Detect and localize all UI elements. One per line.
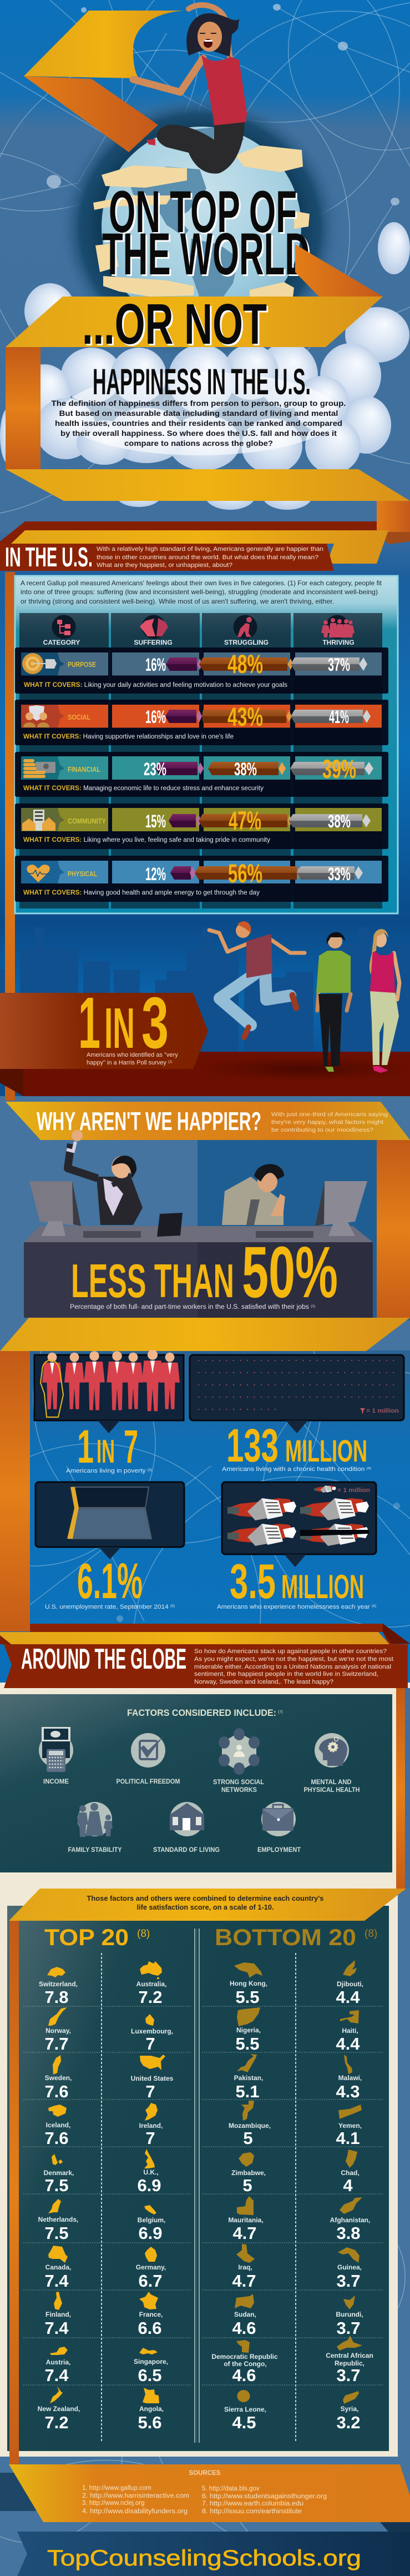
stat: 3.5 million homeless (217, 1482, 376, 1610)
top 20 column one: 7.4 (44, 2271, 69, 2291)
top 20 column two: 6.5 (138, 2366, 162, 2385)
banner text: Norway, Sweden and Iceland,. The least happy? (194, 1679, 333, 1685)
footer banner: TopCounselingSchools.org (47, 2546, 361, 2570)
bottom 20 column one: of the Congo, (224, 2360, 267, 2368)
bottom 20 column one: 4.6 (232, 2366, 256, 2385)
heading: bottom 20: (8) (365, 1928, 377, 1940)
row: purpose: 37% (328, 655, 350, 675)
dark band behind sources (0, 2473, 61, 2511)
row: social: SOCIAL (68, 714, 90, 721)
stat: 133 million chronic: (4) (367, 1467, 371, 1470)
top 20 column two: 6.6 (138, 2318, 162, 2338)
orange strip (9, 1921, 19, 2465)
panel: factors considered: (7) (278, 1710, 283, 1714)
intro paragraph: The definition of happiness differs from person to person, group to group. (51, 399, 346, 408)
source list one: 1. http://www.gallup.com (82, 2485, 151, 2492)
top 20 column two: 6.9 (138, 2223, 163, 2243)
bottom 20 column two: 3.7 (336, 2366, 361, 2385)
bottom 20 column one (211, 1980, 278, 2432)
illustration: woman in pink (369, 929, 399, 1073)
bottom 20 column two: Chad, (341, 2169, 360, 2177)
bottom 20 column one: 5 (243, 2128, 253, 2148)
source list two: 8. http://issuu.com/earthinstitute (202, 2508, 302, 2515)
why text (271, 1111, 388, 1133)
bottom 20 column one: 4.5 (232, 2413, 256, 2432)
panel: gallup survey (15, 576, 398, 913)
banner: in the u.s.: IN THE U.S. (5, 543, 93, 573)
ribbon: gold below desk (0, 1318, 410, 1351)
top 20 column one: Netherlands, (38, 2216, 78, 2223)
city skyline (0, 927, 410, 1052)
title: on top of the world (102, 178, 311, 289)
bottom 20 column two: Central African (326, 2352, 373, 2359)
bottom 20 column one: Nigeria, (236, 2026, 261, 2034)
icon: suffering piggy bank (140, 615, 168, 639)
top 20 column one: 7.5 (44, 2176, 69, 2195)
survey intro: A recent Gallup poll measured Americans' feelings about their own lives in five categories. (1) For each category, people fit (21, 580, 382, 587)
banner text (194, 1648, 394, 1685)
top 20 column two: 5.6 (138, 2413, 162, 2432)
top 20 column one: Norway, (45, 2027, 71, 2035)
ribbon: gold banner with or not: ...OR NOT (82, 292, 267, 356)
stat: 1 in 7 poverty (34, 1350, 184, 1474)
row: purpose: 48% (227, 649, 263, 679)
heading: top 20: TOP 20 (44, 1924, 129, 1950)
stat: 1 in 7 poverty: 7 (124, 1420, 138, 1473)
row: community: 47% (229, 806, 261, 835)
row: purpose: PURPOSE (68, 661, 96, 669)
illustration: woman in green (316, 932, 351, 1072)
row: purpose (15, 647, 388, 694)
top 20 column one (38, 1980, 80, 2432)
icon: thriving group (321, 615, 355, 639)
column headers: SUFFERING (134, 639, 173, 646)
bottom 20 column two: Djibouti, (337, 1980, 363, 1988)
why text: they're very happy, what factors might (271, 1119, 383, 1126)
stat caption: Americans who identified as "very (87, 1052, 178, 1058)
row: physical: PHYSICAL (68, 870, 97, 878)
pictogram rows (196, 1360, 398, 1415)
banner text: miserable either. According to a United Nations analysis of national (194, 1664, 391, 1670)
ribbon: left orange vertical (6, 347, 41, 469)
intro paragraph: But based on measurable data including standard of living and mental (59, 409, 338, 418)
icon: open briefcase (67, 1487, 151, 1539)
bottom 20 column one: Hong Kong, (230, 1980, 267, 1987)
banner text: So how do Americans stack up against people in other countries? (194, 1648, 387, 1655)
illustration: jumping man (209, 921, 305, 1037)
ribbon: why band (6, 1102, 410, 1140)
row: purpose: 16% (145, 655, 166, 675)
row: community: 38% (328, 811, 351, 831)
top 20 column one: 7.2 (44, 2413, 69, 2432)
bottom 20 column two: Afghanistan, (330, 2216, 370, 2224)
panel: factors considered (0, 1694, 392, 1872)
bottom 20 column one: 5.5 (235, 1987, 260, 2007)
bottom 20 column one: Zimbabwe, (231, 2169, 266, 2177)
factor: income: INCOME (43, 1779, 69, 1785)
ribbons above around the globe (0, 1624, 410, 1644)
bottom 20 column two: 4.4 (336, 1987, 360, 2007)
ribbon: satisfaction note: life satisfaction score, on a scale of 1-10. (136, 1904, 274, 1911)
stat: 133 million chronic: Americans living with a chronic health condition (222, 1466, 350, 1473)
banner: around the globe (4, 1643, 408, 1688)
stat: 133 million chronic: 133 (226, 1419, 279, 1472)
stat: 1 in 7 poverty: Americans living in poverty (66, 1468, 139, 1474)
bottom 20 column one: Iraq, (238, 2263, 252, 2271)
bottom 20 column two: Yemen, (338, 2122, 362, 2130)
icon: category (52, 615, 75, 639)
stat: 6.1% unemployment: 6.1% (77, 1554, 143, 1609)
bottom 20 column one: 5 (242, 2176, 252, 2195)
source list two: 7. http://www.earth.columbia.edu (202, 2500, 303, 2507)
ribbon: satisfaction note (9, 1889, 406, 1921)
banner text (97, 546, 323, 569)
bottom 20 column two: 4.1 (336, 2128, 360, 2148)
survey intro: or thriving (strong and consistent well-being). While most of us aren't suffering, we aren't thriving, either. (21, 598, 334, 605)
stat caption (87, 1052, 178, 1066)
top 20 column one: 7.4 (44, 2366, 69, 2385)
bottom 20 column one: Democratic Republic (211, 2353, 278, 2361)
top 20 column one: 7.8 (44, 1987, 69, 2007)
source list one: 4. http://www.disabilityfunders.org (82, 2508, 188, 2515)
top 20 column two: 7 (145, 2128, 155, 2148)
top 20 column one: 7.5 (44, 2223, 69, 2243)
bottom 20 column one: 4.7 (232, 2223, 257, 2243)
top 20 column one: Denmark, (44, 2169, 74, 2177)
bottom 20 column two: 3.7 (336, 2318, 361, 2338)
stat: 1 in 7 poverty: (3) (148, 1469, 152, 1472)
orange right strip (377, 1140, 410, 1318)
bottom 20 column two: Guinea, (337, 2263, 362, 2271)
factor: strong social networks: NETWORKS (221, 1787, 257, 1794)
top 20 column two: U.K., (143, 2168, 159, 2176)
factor: mental and physical health: MENTAL AND (311, 1779, 352, 1786)
stat: 6.1% unemployment (36, 1482, 184, 1610)
row: financial: 38% (234, 759, 257, 779)
row: social: 41% (329, 707, 349, 727)
bottom 20 column one: 5.1 (235, 2082, 260, 2101)
balloons (0, 222, 410, 510)
stat: less than 50%: LESS THAN (71, 1255, 234, 1308)
column backgrounds (19, 613, 382, 908)
source list one: 3. http://www.nclej.org (82, 2500, 144, 2507)
why text: With just one-third of Americans saying (271, 1111, 388, 1118)
ribbon: upper orange fold (24, 76, 158, 152)
banner text: With a relatively high standard of living, Americans generally are happier than (97, 546, 323, 553)
ribbon: upper gold banner (24, 11, 184, 78)
row: financial: WHAT IT COVERS: Managing economic life to reduce stress and enhance security (23, 785, 264, 792)
column headers (43, 639, 355, 646)
row: purpose: WHAT IT COVERS: Liking your daily activities and feeling motivation to achieve your goals (24, 682, 287, 689)
factor: standard of living (153, 1802, 220, 1854)
top 20 column one: Iceland, (46, 2121, 70, 2129)
ribbon: gold banner with or not (6, 292, 383, 358)
stat caption: (2) (168, 1061, 172, 1064)
stat: 6.1% unemployment: U.S. unemployment rate, September 2014 (45, 1604, 159, 1610)
bottom 20 column two: Republic, (335, 2359, 365, 2367)
intro paragraph: by their overall happiness. So where does the U.S. fall and how does it (60, 429, 337, 438)
row: financial: FINANCIAL (68, 766, 100, 774)
bottom 20 column one: 4.6 (232, 2318, 256, 2338)
top 20 column two: Angola, (139, 2405, 164, 2413)
bottom 20 country maps (234, 1960, 362, 2404)
factor: political freedom: POLITICAL FREEDOM (117, 1779, 180, 1785)
factor: strong social networks: STRONG SOCIAL (213, 1779, 264, 1786)
factor: family stability: FAMILY STABILITY (68, 1847, 122, 1854)
banner: in the u.s. (0, 543, 334, 573)
ribbon: satisfaction note: Those factors and others were combined to determine each country's (87, 1895, 324, 1902)
stat: 133 million chronic (190, 1355, 404, 1473)
top 20 column one: Canada, (45, 2263, 71, 2271)
people group (41, 1350, 180, 1417)
legend: = 1 million (366, 1408, 399, 1414)
stat: 133 million chronic: MILLION (285, 1433, 367, 1468)
row: physical: 33% (328, 864, 351, 884)
row: physical: 12% (145, 864, 166, 884)
stat caption: happy" in a Harris Poll survey (87, 1059, 166, 1066)
factor: political freedom (117, 1733, 180, 1785)
bottom 20 column one: Sudan, (234, 2311, 256, 2318)
top 20 column one: 7.6 (44, 2082, 69, 2101)
row: financial: 39% (322, 754, 356, 784)
top 20 column one: Sweden, (45, 2074, 72, 2082)
top 20 column two: United States (131, 2075, 174, 2082)
bottom 20 column two: Burundi, (336, 2311, 363, 2318)
bottom 20 column two: 4 (343, 2176, 353, 2195)
stat: less than 50%: 50% (242, 1231, 338, 1313)
monitor left (29, 1181, 81, 1236)
survey intro (21, 580, 382, 605)
banner: 1 in 3: 1 (78, 982, 100, 1063)
factor: mental and physical health: PHYSICAL HEALTH (304, 1787, 360, 1794)
panel: factors considered: FACTORS CONSIDERED INCLUDE: (127, 1708, 276, 1718)
top 20 column one: Finland, (45, 2311, 71, 2318)
top 20 column one: 7.4 (44, 2318, 69, 2338)
factor: strong social networks (213, 1728, 264, 1794)
top 20 column two (131, 1980, 174, 2432)
bottom 20 column one: 4.7 (232, 2271, 256, 2291)
illustration: happy woman at desk (67, 1130, 143, 1225)
row: physical: WHAT IT COVERS: Having good health and ample energy to get through the day (23, 890, 260, 896)
bottom 20 column two: 4.4 (336, 2034, 360, 2053)
globe with clouds (59, 94, 341, 361)
banner text: What are they happiest, or unhappiest, about? (97, 562, 232, 569)
top 20 column one: New Zealand, (38, 2405, 80, 2413)
continents (128, 127, 244, 331)
dark corner fold (380, 2522, 410, 2532)
factor: employment: EMPLOYMENT (257, 1847, 301, 1854)
row: financial (15, 752, 388, 797)
cream clouds (93, 145, 310, 297)
source list one: 2. http://www.harrisinteractive.com (82, 2493, 189, 2499)
footer banner (17, 2532, 410, 2576)
ribbon: sources (9, 2464, 410, 2522)
stat: less than 50% (70, 1231, 338, 1313)
banner: around the globe: AROUND THE GLOBE (21, 1643, 186, 1675)
bottom 20 column two: Malawi, (338, 2074, 362, 2082)
bottom 20 column one: Pakistan, (234, 2074, 263, 2082)
row: financial: 23% (144, 759, 166, 779)
floor (0, 1052, 410, 1096)
row: community: 15% (145, 811, 166, 831)
row: community (15, 804, 388, 849)
column headers: STRUGGLING (224, 639, 269, 646)
bottom 20 column two: 3.2 (336, 2413, 361, 2432)
stat: 3.5 million homeless: (6) (372, 1605, 376, 1608)
top 20 column two: 7 (145, 2034, 155, 2053)
stat: less than 50%: Percentage of both full- and part-time workers in the U.S. satisfied with their jobs (70, 1304, 297, 1310)
top 20 column two: France, (139, 2311, 163, 2318)
orange vertical strip (5, 572, 15, 1101)
why text: be contributing to our moodiness? (271, 1127, 373, 1133)
bottom 20 column one: Mozambique, (229, 2122, 271, 2130)
monitor right (315, 1181, 367, 1236)
row: social: 16% (145, 707, 166, 727)
source list two: 5. http://data.bls.gov (202, 2485, 260, 2492)
heading: bottom 20: BOTTOM 20 (215, 1924, 356, 1950)
column headers: THRIVING (322, 639, 355, 646)
bottom 20 column two (326, 1980, 373, 2432)
survey intro: into one of three groups: suffering (low and inconsistent well-being), struggling (moderate and inconsistent well-being) (21, 589, 378, 596)
intro paragraph: compare to nations across the globe? (124, 439, 273, 448)
top 20 column two: Australia, (136, 1980, 166, 1988)
banner: 1 in 3 (0, 982, 208, 1069)
top 20 column two: Ireland, (139, 2122, 163, 2130)
ribbon: right orange fold (295, 244, 383, 297)
sleeping figures (227, 1498, 369, 1546)
top 20 column two: Germany, (136, 2263, 166, 2271)
bottom 20 column two: 3.8 (336, 2223, 361, 2243)
row: community: WHAT IT COVERS: Liking where you live, feeling safe and taking pride in community (23, 837, 270, 843)
dividers (23, 1929, 384, 2443)
factor: standard of living: STANDARD OF LIVING (153, 1847, 220, 1854)
top 20 column two: Luxembourg, (131, 2027, 173, 2035)
heading: top 20: (8) (137, 1928, 150, 1940)
illustration: stressed man at desk (222, 1164, 285, 1225)
top 20 column one: 7.6 (44, 2128, 69, 2148)
ribbon: gold banner with or not: ...OR NOT (84, 294, 269, 358)
orange right strip lower (396, 1688, 405, 1891)
ribbon: why band: WHY AREN'T WE HAPPIER? (37, 1107, 261, 1136)
ribbon: sources: SOURCES (189, 2470, 221, 2477)
panel: rankings (7, 1906, 389, 2465)
column headers: CATEGORY (43, 639, 80, 646)
source list two (202, 2485, 327, 2515)
source list two: 6. http://www.studentsagainsthunger.org (202, 2493, 327, 2500)
photo frame (157, 1213, 183, 1237)
ribbon folds above in the u.s. (0, 501, 410, 564)
banner text: sentiment, the happiest people in the world live in Switzerland, (194, 1671, 378, 1678)
row: community: COMMUNITY (68, 817, 107, 825)
ribbon: lower gold band (6, 469, 410, 501)
top 20 column two: 7.2 (138, 1987, 163, 2007)
row: physical (15, 856, 388, 902)
source list one (82, 2485, 189, 2515)
top 20 column two: Singapore, (134, 2358, 168, 2366)
top 20 country maps (47, 1961, 165, 2403)
bottom 20 column two: Haiti, (342, 2027, 358, 2035)
banner text: As you might expect, we're not the happiest, but we're not the most (194, 1656, 394, 1663)
stat: 1 in 7 poverty: 1 (77, 1420, 94, 1473)
banner text: those in other countries around the world. But what does that really mean? (97, 554, 318, 561)
bottom 20 column one: Sierra Leone, (224, 2406, 266, 2413)
factor: family stability (68, 1802, 122, 1854)
row: social: WHAT IT COVERS: Having supportive relationships and love in one's life (23, 734, 234, 740)
bottom 20 column two: 3.7 (336, 2271, 361, 2291)
row: physical: 56% (228, 858, 262, 888)
stat: less than 50%: (1) (311, 1305, 315, 1308)
top 20 column one: 7.7 (44, 2034, 69, 2053)
illustration: jumping woman (133, 5, 247, 174)
top 20 column two: 6.9 (137, 2176, 161, 2195)
top 20 column two: Belgium, (138, 2216, 165, 2224)
desk (24, 1181, 373, 1318)
banner: 1 in 3: 3 (141, 982, 169, 1063)
legend (314, 1485, 370, 1494)
stat: 3.5 million homeless: Americans who experience homelessness each year (217, 1604, 360, 1610)
orange left strip (0, 1351, 30, 1631)
stat: 3.5 million homeless: 3.5 (230, 1554, 276, 1609)
factor: mental and physical health (304, 1733, 360, 1794)
legend: = 1 million (337, 1487, 370, 1494)
banner: 1 in 3: IN (104, 996, 135, 1060)
intro paragraph: health issues, countries and their residents can be ranked and compared (55, 419, 342, 428)
bottom 20 column two: 4.3 (336, 2082, 360, 2101)
top 20 column two: 7 (145, 2082, 155, 2101)
icon: struggling figure (233, 615, 257, 639)
bottom 20 column one: Mauritania, (228, 2216, 264, 2224)
bottom 20 column two: Syria, (341, 2405, 358, 2413)
stat: 6.1% unemployment: (5) (170, 1605, 175, 1608)
intro paragraph (51, 399, 346, 448)
top 20 column two: 6.7 (138, 2271, 163, 2291)
row: social (15, 700, 388, 745)
bottom 20 column one: 5.5 (235, 2034, 260, 2053)
stat: 1 in 7 poverty: IN (97, 1433, 115, 1470)
row: social: 43% (227, 702, 263, 731)
top 20 column one: Austria, (46, 2358, 70, 2366)
top 20 column one: Switzerland, (39, 1980, 78, 1988)
factor: income (39, 1727, 73, 1785)
factor: employment (257, 1802, 301, 1854)
